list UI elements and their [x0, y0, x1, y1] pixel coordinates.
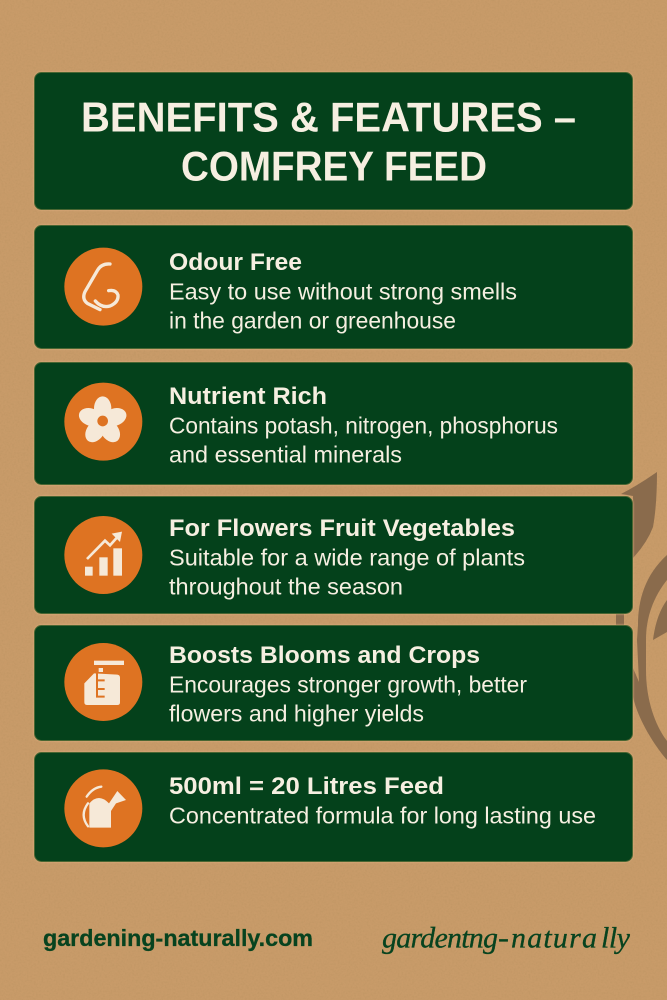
odour free text: in the garden or greenhouse	[169, 308, 456, 334]
icon: flower	[64, 383, 142, 461]
title: COMFREY FEED	[181, 142, 487, 190]
500ml text: Concentrated formula for long lasting use	[169, 802, 596, 828]
icon: growth chart	[64, 516, 142, 594]
panel: 500ml concentrate	[34, 752, 632, 862]
odour free text: Odour Free	[169, 249, 302, 276]
footer script logo: -	[498, 922, 509, 954]
panel: flowers fruit vegetables	[34, 496, 632, 614]
flowers fruit vegetables text: throughout the season	[169, 574, 403, 600]
footer script logo	[382, 922, 631, 954]
odour free text: Easy to use without strong smells	[169, 278, 517, 304]
panel: boosts blooms and crops	[34, 626, 632, 740]
flowers fruit vegetables text	[169, 515, 525, 600]
boosts blooms text: Encourages stronger growth, better	[169, 672, 527, 698]
500ml text	[169, 773, 596, 828]
title	[81, 94, 576, 190]
odour free text	[169, 249, 517, 334]
flowers fruit vegetables text: For Flowers Fruit Vegetables	[169, 515, 515, 542]
boosts blooms text	[169, 642, 527, 726]
icon: watering can	[64, 769, 142, 847]
panel: odour free	[34, 226, 632, 348]
footer script logo: natura	[511, 922, 597, 954]
nutrient rich text	[169, 383, 558, 468]
title panel	[34, 72, 632, 210]
nutrient rich text: Contains potash, nitrogen, phosphorus	[169, 412, 558, 438]
title: BENEFITS & FEATURES –	[81, 94, 576, 140]
flowers fruit vegetables text: Suitable for a wide range of plants	[169, 544, 525, 570]
watermark: leaf and stem	[616, 472, 667, 760]
nutrient rich text: Nutrient Rich	[169, 383, 327, 410]
boosts blooms text: Boosts Blooms and Crops	[169, 642, 480, 669]
boosts blooms text: flowers and higher yields	[169, 700, 424, 726]
footer script logo: lly	[601, 922, 631, 954]
footer website: gardening-naturally.com	[43, 925, 313, 951]
nutrient rich text: and essential minerals	[169, 442, 402, 468]
icon: measuring jar	[64, 643, 142, 721]
icon: nose	[64, 248, 142, 326]
500ml text: 500ml = 20 Litres Feed	[169, 773, 444, 800]
panel: nutrient rich	[34, 362, 632, 484]
footer script logo: gardentng	[382, 922, 498, 954]
